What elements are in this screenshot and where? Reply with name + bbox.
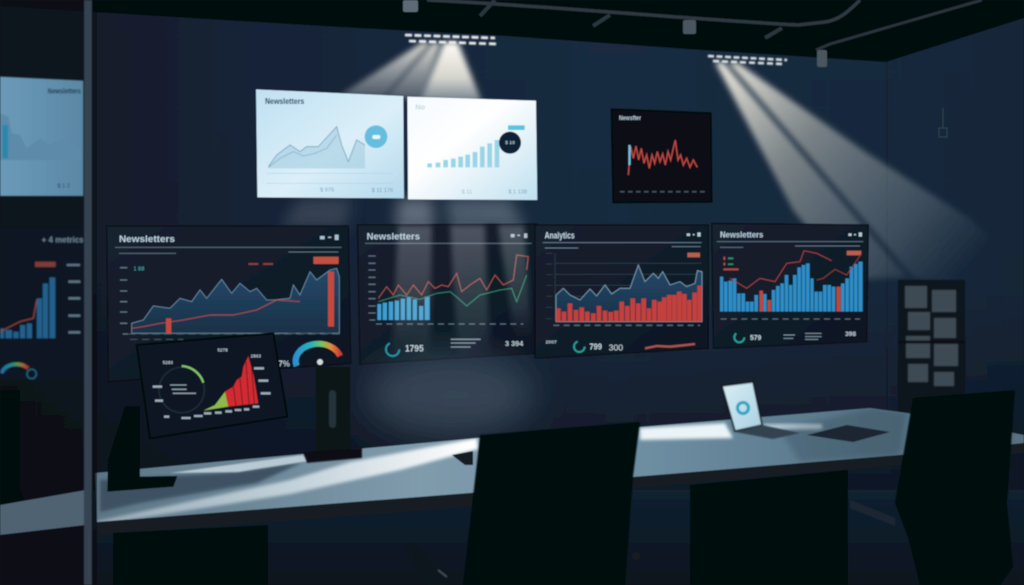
caster (632, 552, 640, 560)
axis values and gridlines (546, 253, 702, 322)
waveform (628, 140, 697, 175)
red bars (166, 272, 334, 333)
reflected gauge (2, 364, 28, 373)
rule (717, 242, 863, 247)
reflected red line (0, 300, 37, 332)
bars (427, 140, 499, 167)
stat 2007: 2007 (546, 339, 557, 345)
red line (730, 251, 832, 288)
donut (734, 332, 744, 342)
footer total: $ 1 138 (508, 189, 527, 195)
footer total: $ 11 176 (372, 188, 393, 194)
dark badge (499, 132, 521, 154)
red action button (313, 257, 339, 264)
hanging cable on right wall (939, 108, 947, 137)
blue marker (628, 145, 631, 165)
mini sparkline (645, 344, 695, 348)
scale labels (153, 368, 271, 418)
reflected heading: Newsletters (48, 86, 81, 95)
stat 799: 799 (589, 342, 603, 351)
panel heading: No (415, 102, 426, 111)
reflected heading: + 4 metrics (42, 236, 84, 245)
angled monitor: red bars and donut (107, 333, 287, 492)
partition post (84, 0, 92, 585)
monitor stand (107, 407, 177, 492)
footer figures: $ 11 (462, 189, 472, 195)
left glass partition (0, 0, 92, 585)
green ramp (203, 392, 228, 411)
bar dividers (233, 362, 254, 406)
soft light column on wall below dashboards (365, 353, 535, 437)
footer figures: $ 976 (320, 187, 334, 193)
desk (95, 408, 1024, 535)
armrest highlight (438, 570, 447, 577)
legend markers green (728, 257, 733, 265)
office chair: right (850, 390, 1015, 585)
area series (556, 265, 702, 322)
gauge stand (303, 367, 362, 463)
badge text: $ 19 (505, 140, 515, 146)
reflected chart (0, 113, 80, 160)
ceiling lamp: right (708, 56, 787, 64)
donut ring (159, 367, 204, 413)
legend rows (783, 333, 822, 339)
reflected tag (35, 262, 56, 267)
light beams from ceiling lamp (right) (715, 62, 1024, 300)
second red line (817, 253, 862, 280)
donut (574, 341, 585, 352)
legend markers (723, 257, 739, 270)
badge circle (365, 125, 387, 148)
heading: Newsletters (720, 231, 764, 240)
area series (132, 268, 339, 333)
lower partition shadow (0, 525, 86, 585)
light beams from ceiling lamp (centre) (340, 42, 482, 102)
dashboard: analytics (535, 225, 708, 358)
red line (378, 255, 528, 298)
red bars (759, 287, 841, 312)
reflected dashboard (0, 227, 84, 380)
blue bars (720, 262, 863, 312)
laptop screen ring (738, 402, 748, 414)
stat figure: 1 88 (133, 267, 144, 273)
axis values (368, 256, 376, 320)
light panel: bright bar chart (407, 97, 537, 200)
tag (847, 251, 861, 255)
labels: 5283 (163, 360, 173, 365)
small wall monitor: red waveform (612, 109, 712, 202)
light streaks across dashboards (392, 225, 532, 360)
green line (378, 275, 527, 306)
badge glyph (372, 135, 380, 139)
rule (365, 242, 532, 245)
centre text (170, 385, 196, 393)
x axis (553, 323, 700, 327)
light panel: newsletters line chart (256, 89, 404, 198)
toolbar icons (511, 233, 527, 238)
label top: 5278 (217, 348, 228, 353)
heading: Newsfter (619, 115, 641, 122)
post shade (92, 12, 97, 585)
dashboard: newsletters blue bars (712, 223, 868, 348)
x axis (128, 333, 340, 339)
armrest (850, 500, 895, 526)
heading: Newsletters (367, 231, 420, 241)
toolbar icons (848, 232, 862, 237)
small pad on desk (452, 451, 473, 465)
laptop base (735, 425, 800, 439)
stat 300: 300 (609, 343, 623, 353)
reflected axis values (67, 265, 80, 332)
label right: 2863 (251, 353, 261, 358)
stat right: 398 (845, 331, 856, 338)
reflected bar (3, 125, 8, 158)
gauge (296, 344, 340, 366)
reflected figures: $ 1 2 (57, 183, 70, 189)
toolbar icons (320, 235, 339, 240)
light spill below top panels (280, 198, 525, 228)
reflected light panel (0, 77, 83, 196)
tag (687, 253, 700, 257)
rule and caption (115, 247, 342, 253)
tag (508, 125, 525, 130)
stat figure: 579 (750, 333, 761, 342)
legend rows (451, 339, 481, 347)
ceiling lamp: centre (405, 35, 497, 44)
axis values (120, 268, 128, 334)
desk pedestal left (113, 525, 268, 585)
heading: Newsletters (119, 234, 175, 244)
x axis (721, 317, 860, 321)
dashboard: newsletters bars and lines (357, 224, 537, 364)
tablet on desk (807, 425, 890, 442)
red legend (248, 261, 275, 266)
area chart (266, 127, 393, 183)
reflected donut (27, 369, 36, 379)
under desk wall and floor (92, 490, 1024, 585)
left desk reflection (0, 490, 86, 535)
baseline (620, 189, 705, 194)
desk pedestal right (690, 470, 848, 585)
blue bars (377, 297, 430, 320)
stat beside gauge: 7% (278, 360, 290, 369)
laptop (722, 382, 800, 439)
x axis (376, 322, 523, 326)
stat figure right: 3 394 (505, 339, 524, 348)
toolbar icons (687, 232, 701, 237)
office chair: centre (402, 422, 640, 585)
heading: Analytics (545, 231, 575, 241)
donut (386, 343, 399, 356)
ceiling with pipes (0, 0, 1024, 67)
left monitor silhouette (0, 390, 25, 507)
armrest (402, 544, 450, 585)
rule and captions (543, 243, 702, 248)
green arc (182, 366, 203, 383)
red trend line (132, 300, 300, 328)
panel heading: Newsletters (265, 97, 305, 106)
dashboard: newsletters area chart (107, 226, 351, 382)
stat figure: 1795 (405, 343, 424, 353)
gauge needle hub (317, 359, 323, 365)
reflected bars (0, 277, 55, 338)
red bars (556, 286, 702, 322)
red bars (225, 356, 258, 407)
shelf with papers (898, 280, 965, 412)
